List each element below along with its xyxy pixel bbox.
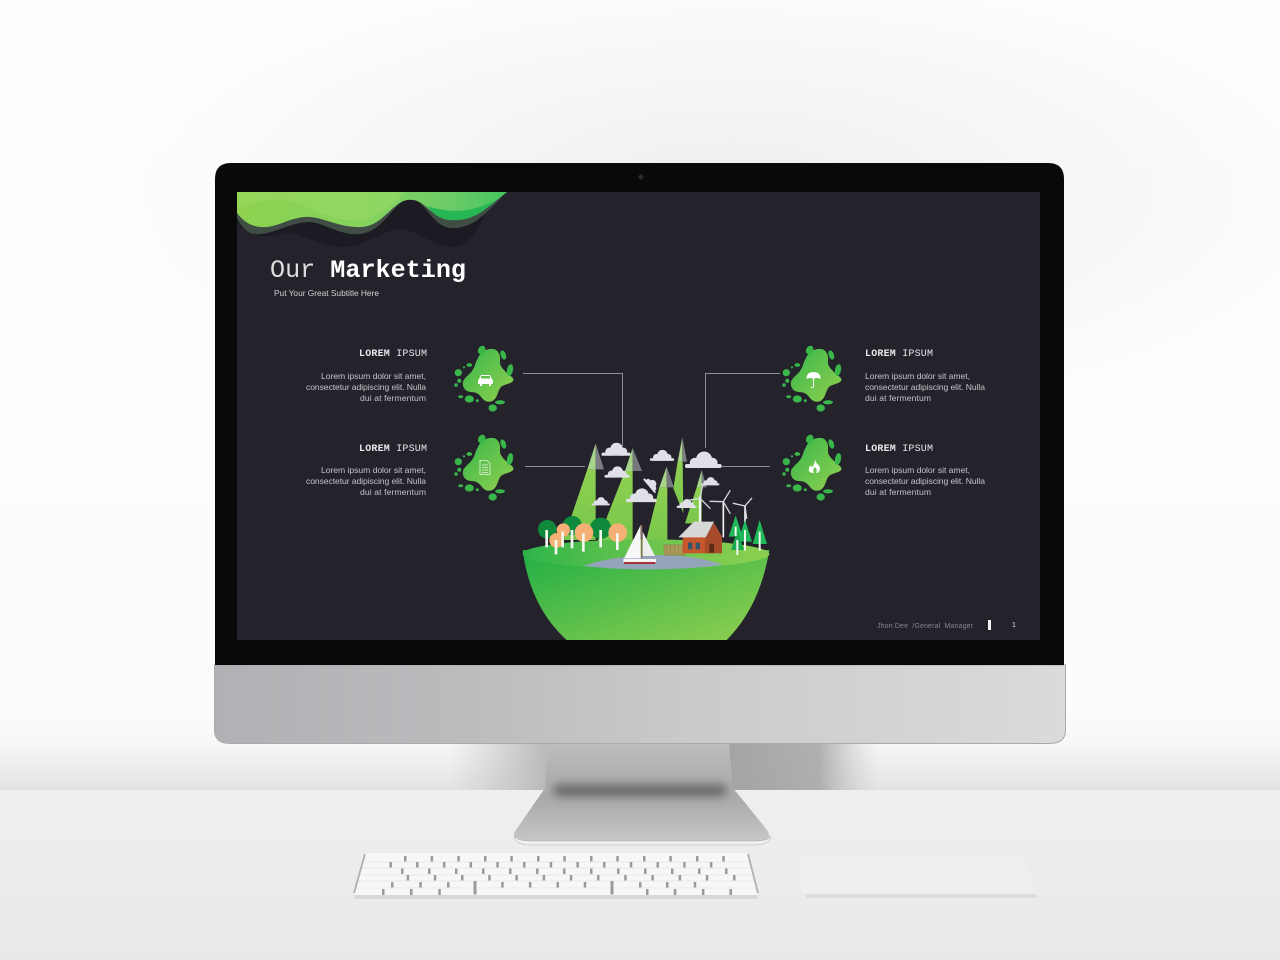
sailboat	[623, 525, 656, 564]
body: Lorem ipsum dolor sit amet,	[865, 465, 970, 475]
lake	[583, 555, 723, 569]
screen slide	[237, 192, 1040, 640]
bowl	[523, 539, 769, 640]
keys	[382, 856, 736, 895]
house	[678, 522, 722, 553]
body: Lorem ipsum dolor sit amet,	[321, 465, 426, 475]
title: Our Marketing	[270, 256, 466, 285]
body	[306, 465, 426, 497]
body: dui at fermentum	[360, 393, 426, 403]
pine trees	[729, 515, 767, 555]
monitor	[214, 163, 1066, 744]
body	[865, 465, 985, 497]
divider bar	[988, 620, 991, 630]
blob icon: flame	[782, 433, 842, 501]
webcam	[638, 174, 644, 180]
body: consectetur adipiscing elit. Nulla	[306, 476, 426, 486]
text block: top left	[306, 349, 427, 403]
clouds	[591, 443, 722, 508]
presenter name: Jhon Dee /General Manager	[877, 623, 974, 630]
blob icon: document	[454, 433, 514, 501]
heading: LOREM IPSUM	[865, 349, 933, 360]
body: consectetur adipiscing elit. Nulla	[865, 476, 985, 486]
body: consectetur adipiscing elit. Nulla	[865, 382, 985, 392]
heading: LOREM IPSUM	[865, 444, 933, 455]
monitor chin	[214, 665, 1066, 744]
heading: LOREM IPSUM	[359, 349, 427, 360]
subtitle: Put Your Great Subtitle Here	[274, 288, 379, 298]
text block: top right	[865, 349, 985, 403]
body: dui at fermentum	[865, 393, 931, 403]
body: consectetur adipiscing elit. Nulla	[306, 382, 426, 392]
trees	[538, 516, 627, 554]
mountains	[563, 437, 707, 545]
desk surface	[0, 790, 1280, 960]
stand shadows on wall	[450, 744, 879, 790]
wind turbines	[687, 485, 752, 537]
body	[306, 371, 426, 403]
central illustration: floating island bowl	[523, 437, 769, 640]
connector lines	[523, 374, 780, 466]
body	[865, 371, 985, 403]
keyboard	[354, 853, 758, 899]
blob icon: umbrella	[782, 344, 842, 412]
body: Lorem ipsum dolor sit amet,	[321, 371, 426, 381]
text block: bottom left	[306, 444, 427, 497]
blob icon: car	[454, 344, 514, 412]
wall halo above monitor	[110, 0, 1280, 420]
top wave decoration	[237, 192, 507, 247]
monitor stand	[514, 744, 771, 845]
fence	[664, 545, 685, 555]
trackpad	[797, 853, 1037, 898]
page number: 1	[1012, 622, 1016, 629]
heading: LOREM IPSUM	[359, 444, 427, 455]
body: dui at fermentum	[865, 487, 931, 497]
monitor bezel	[215, 163, 1064, 665]
body: dui at fermentum	[360, 487, 426, 497]
text block: bottom right	[865, 444, 985, 497]
body: Lorem ipsum dolor sit amet,	[865, 371, 970, 381]
footer	[877, 620, 1016, 630]
